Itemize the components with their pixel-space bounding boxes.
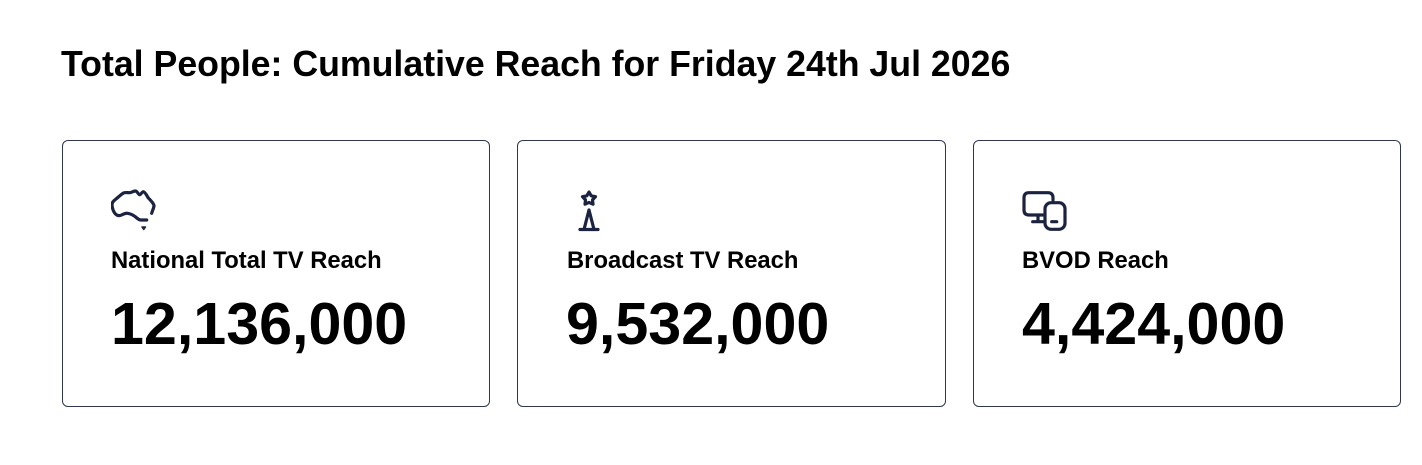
- value: 4,424,000: [1022, 290, 1285, 357]
- icon: broadcast tower: [578, 190, 600, 232]
- label: National Total TV Reach: [111, 247, 382, 274]
- icon: map of Australia: [111, 189, 156, 230]
- icon: monitor and phone: [1022, 191, 1067, 231]
- title: Total People: Cumulative Reach for Friday 24th Jul 2026: [61, 44, 1010, 84]
- value: 9,532,000: [566, 290, 829, 357]
- value: 12,136,000: [111, 290, 407, 357]
- label: Broadcast TV Reach: [567, 247, 798, 274]
- panel: national total TV reach: [62, 140, 490, 407]
- panel: BVOD reach: [973, 140, 1401, 407]
- label: BVOD Reach: [1022, 247, 1169, 274]
- panel: broadcast TV reach: [517, 140, 946, 407]
